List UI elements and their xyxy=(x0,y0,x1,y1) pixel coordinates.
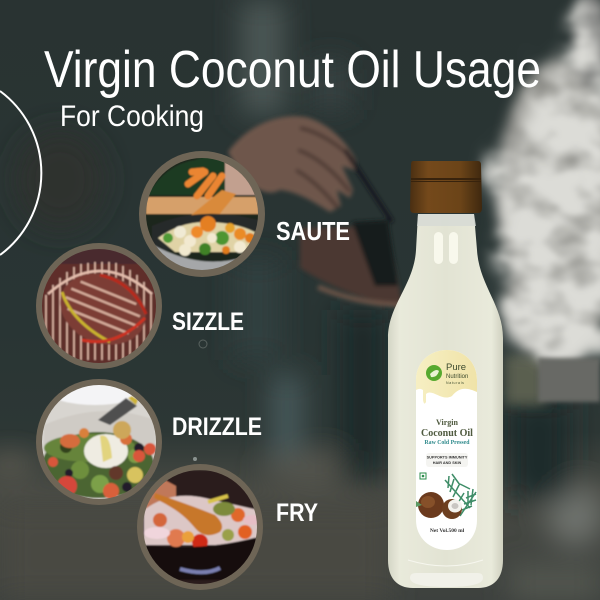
steam cloud xyxy=(485,0,600,405)
benefit pill: HAIR AND SKIN xyxy=(433,461,462,465)
product name: Virgin xyxy=(436,418,459,427)
bottle body xyxy=(388,214,503,588)
chef hands and utensil xyxy=(228,116,402,305)
vegetarian mark xyxy=(420,473,426,479)
label: drizzle: DRIZZLE xyxy=(172,413,262,441)
product name xyxy=(421,418,473,446)
small bokeh ring xyxy=(199,340,207,348)
coconut and palm leaves xyxy=(416,474,476,519)
cream label top with drips xyxy=(416,350,477,404)
net volume: Net Vol.500 ml xyxy=(430,528,465,534)
decorative white arc xyxy=(0,91,41,255)
label: saute: SAUTE xyxy=(276,216,350,246)
brand logo: Pure xyxy=(446,362,466,373)
bottle cap xyxy=(410,161,482,213)
brand logo: Nutrition xyxy=(446,374,468,380)
circle photo: drizzle salad xyxy=(36,379,162,505)
circle photo: saute vegetables xyxy=(139,150,265,280)
circle photo: sizzle grill xyxy=(36,243,162,369)
label: fry: FRY xyxy=(276,499,318,527)
small droplet xyxy=(193,457,197,461)
benefit pill: SUPPORTS IMMUNITY xyxy=(427,456,468,460)
benefit pill xyxy=(426,453,468,467)
circle photo: fry wok xyxy=(137,464,263,590)
label: sizzle: SIZZLE xyxy=(172,308,244,336)
brand logo xyxy=(426,362,468,385)
subtitle: For Cooking xyxy=(60,100,204,133)
product name: Coconut Oil xyxy=(421,428,473,439)
coconut oil bottle xyxy=(388,161,503,588)
product name: Raw Cold Pressed xyxy=(425,440,470,446)
product label xyxy=(416,350,477,550)
brand logo: Naturals xyxy=(446,381,465,385)
